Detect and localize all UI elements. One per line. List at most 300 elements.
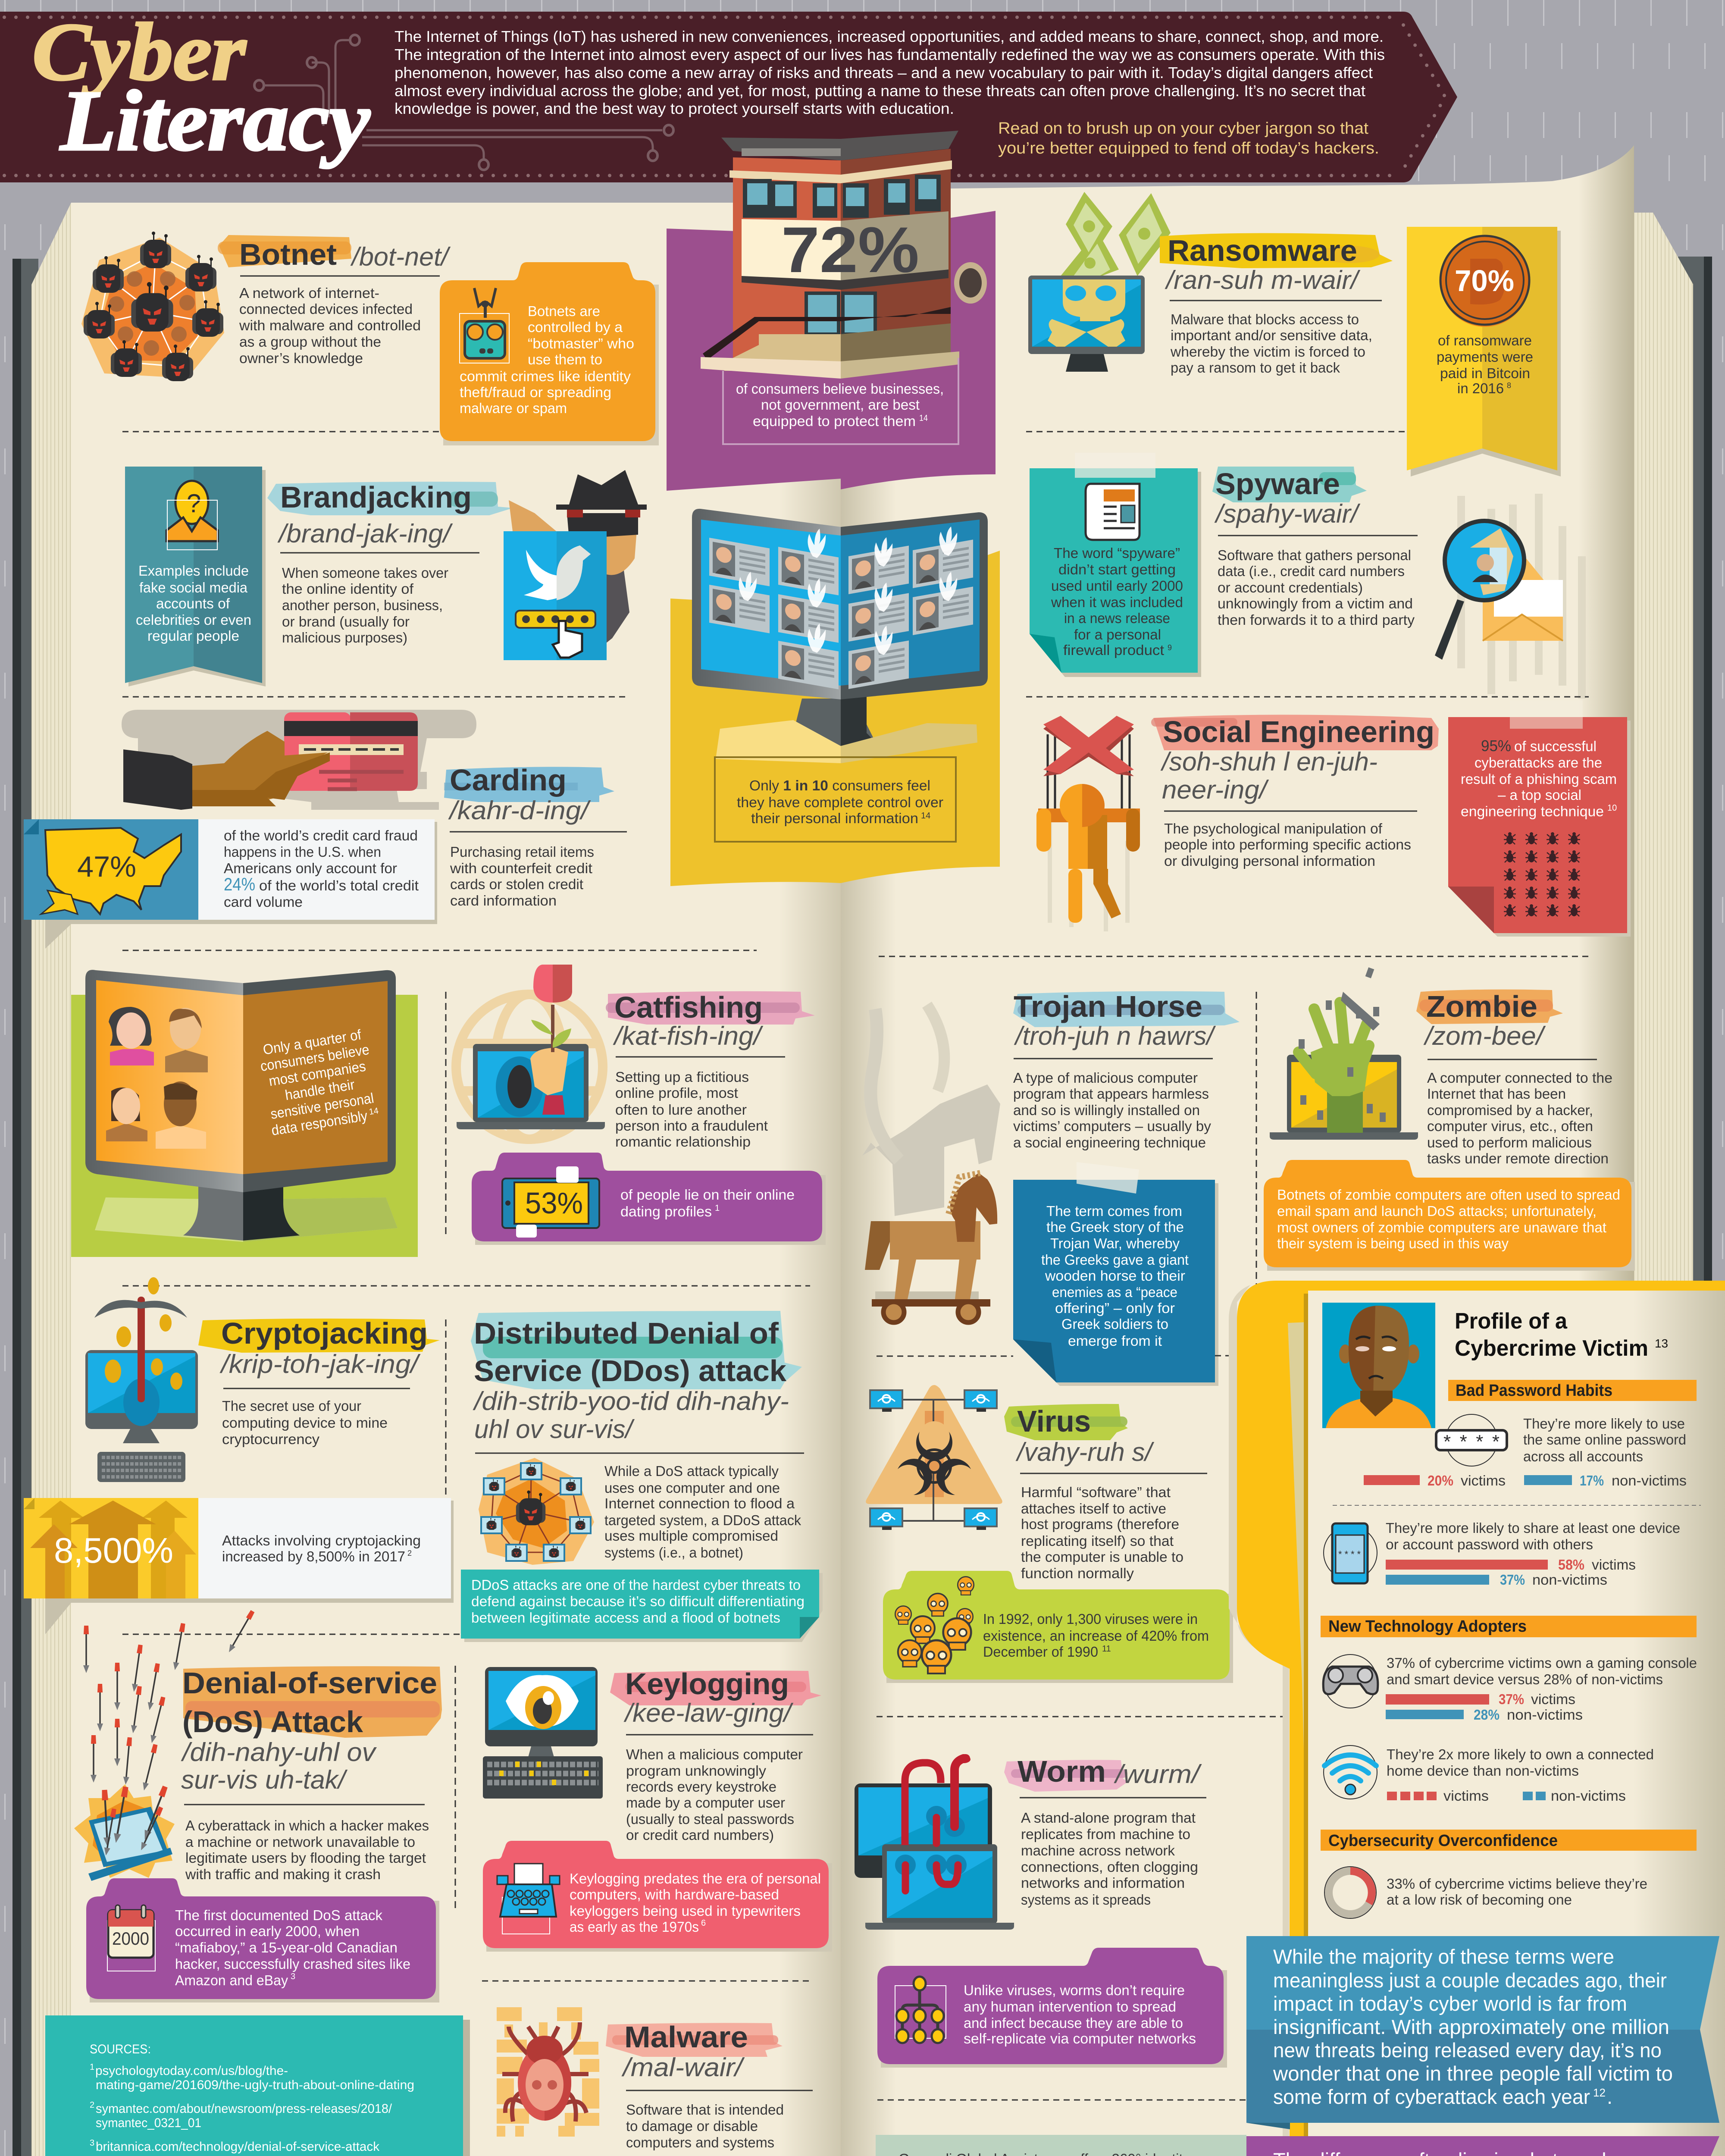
note text: the Greeks gave a giant <box>1041 1252 1189 1268</box>
icon: 33% ring <box>1324 1867 1376 1918</box>
ribbon text: regular people <box>147 628 239 644</box>
pronunciation: /kat-fish-ing/ <box>613 1022 764 1050</box>
note <box>1013 1162 1218 1386</box>
icon: eye monitor and keyboard <box>483 1667 603 1799</box>
definition: victims’ computers – usually by <box>1013 1118 1212 1134</box>
definition <box>1170 311 1372 376</box>
definition: Internet connection to flood a <box>604 1495 795 1511</box>
blue banner text: some form of cyberattack each year <box>1273 2085 1590 2108</box>
note text: 9 <box>1168 643 1172 652</box>
blue banner text: While the majority of these terms were <box>1273 1945 1614 1968</box>
ribbon text: Examples include <box>138 563 249 579</box>
definition: compromised by a hacker, <box>1427 1102 1593 1118</box>
callout folder <box>877 1948 1227 2068</box>
green backing <box>71 995 418 1257</box>
definition: systems (i.e., a botnet) <box>604 1545 743 1561</box>
definition: another person, business, <box>282 597 443 613</box>
icon: biohazard triangle with monitors <box>866 1385 1002 1530</box>
note text: offering” – only for <box>1055 1300 1175 1316</box>
blue banner text: insignificant. With approximately one million <box>1273 2015 1669 2038</box>
caption: of consumers believe businesses, <box>736 381 944 397</box>
heading: Distributed Denial of <box>474 1316 779 1350</box>
source list: 2 <box>90 2100 94 2110</box>
pronunciation: /dih-nahy-uhl ov <box>181 1738 377 1767</box>
callout text: 3 <box>291 1972 295 1981</box>
note text: for a personal <box>1074 627 1161 642</box>
source list: symantec.com/about/newsroom/press-releases/2018/ <box>96 2102 392 2116</box>
pronunciation: /wurm/ <box>1114 1760 1202 1789</box>
caption: they have complete control over <box>737 794 943 810</box>
heading: Denial-of-service <box>182 1666 437 1700</box>
heading brush <box>1004 1760 1128 1792</box>
note text: Greek soldiers to <box>1061 1316 1168 1332</box>
callout text: most owners of zombie computers are unaware that <box>1277 1219 1606 1235</box>
heading brush <box>1160 233 1393 268</box>
definition <box>604 1463 801 1561</box>
callout text: Amazon and eBay <box>175 1972 288 1988</box>
definition: unknowingly from a victim and <box>1218 595 1413 611</box>
callout text: 1 <box>715 1203 720 1213</box>
note text: The word “spyware” <box>1054 545 1180 561</box>
folder tab shape <box>1237 1281 1725 2156</box>
rotated caption: Only a quarter of <box>262 1026 363 1058</box>
caption: their personal information <box>751 810 918 826</box>
ribbon <box>125 467 266 686</box>
definition <box>615 1069 768 1150</box>
caption <box>736 381 944 429</box>
gaming bars: 28% <box>1474 1707 1500 1723</box>
definition: uses one computer and one <box>604 1480 780 1496</box>
panel: Worm <box>855 1755 1227 2068</box>
blue banner text: . <box>1607 2085 1612 2108</box>
source list: 3 <box>90 2138 94 2148</box>
connected home legend <box>1387 1788 1626 1804</box>
callout text: self-replicate via computer networks <box>964 2031 1196 2046</box>
section bar: cybersecurity overconfidence: Cybersecurity Overconfidence <box>1328 1832 1558 1850</box>
stat text: 2 <box>407 1549 412 1557</box>
icon: flying money <box>1061 192 1171 276</box>
icon: bug on pixel grid <box>497 2007 599 2137</box>
panel: sources <box>45 2015 470 2156</box>
callout text: email spam and launch DoS attacks; unfortunately, <box>1277 1203 1597 1219</box>
definition: pay a ransom to get it back <box>1171 360 1340 376</box>
definition: When a malicious computer <box>626 1746 803 1762</box>
panel: Virus <box>866 1385 1233 1683</box>
monitor frame <box>85 970 243 1192</box>
definition: a machine or network unavailable to <box>185 1834 415 1850</box>
heading brush <box>1013 991 1240 1027</box>
yellow backing <box>670 551 1000 886</box>
note text: didn’t start getting <box>1058 561 1176 577</box>
heading: Catfishing <box>614 990 763 1024</box>
stat number: 53% <box>525 1186 583 1220</box>
icon: typewriter <box>497 1864 560 1934</box>
definition: the computer is unable to <box>1021 1549 1183 1565</box>
definition: and so is willingly installed on <box>1013 1102 1200 1118</box>
gaming bars: non-victims <box>1507 1707 1583 1723</box>
definition: A computer connected to the <box>1427 1070 1612 1086</box>
icon: wifi <box>1324 1745 1377 1799</box>
gaming bars <box>1386 1691 1583 1723</box>
definition: person into a fraudulent <box>615 1118 768 1134</box>
heading brush <box>610 1670 821 1705</box>
callout text <box>175 1907 410 1988</box>
definition <box>222 1398 388 1447</box>
panel: Ransomware <box>1028 192 1561 476</box>
source list: 1 <box>90 2062 94 2072</box>
panel: Trojan Horse <box>862 990 1240 1386</box>
definition: function normally <box>1021 1565 1134 1581</box>
definition: with traffic and making it crash <box>185 1866 381 1882</box>
definition: connected devices infected <box>239 301 413 317</box>
note text: result of a phishing scam <box>1461 771 1617 787</box>
caption: not government, are best <box>761 397 920 413</box>
connected home legend: non-victims <box>1551 1788 1626 1804</box>
panel: Cryptojacking <box>24 1277 454 1634</box>
callout text: defend against because it’s so difficult differentiating <box>471 1593 805 1609</box>
heading <box>474 1316 786 1388</box>
title: Literacy <box>59 73 370 169</box>
pronunciation: /dih-strib-yoo-tid dih-nahy- <box>473 1387 789 1416</box>
definition: card information <box>450 893 557 909</box>
icon: network hierarchy <box>895 1977 946 2043</box>
banner: closing blue <box>1246 1936 1719 2129</box>
note text: 10 <box>1607 803 1617 813</box>
panel: Generali sponsor note <box>876 2135 1246 2156</box>
callout text: The first documented DoS attack <box>175 1907 383 1923</box>
heading brush <box>606 991 815 1025</box>
rotated caption: 14 <box>368 1106 379 1117</box>
ribbon text: fake social media <box>139 580 248 595</box>
callout text: as early as the 1970s <box>570 1919 699 1935</box>
icon: password: **** <box>1443 1431 1500 1452</box>
source list: symantec_0321_01 <box>96 2116 201 2130</box>
section bar: bad password habits: Bad Password Habits <box>1456 1382 1612 1400</box>
caption frame <box>715 757 956 842</box>
panel: Spyware <box>1030 453 1586 699</box>
callout text: computers, with hardware-based <box>570 1887 779 1902</box>
heading brush <box>606 2023 783 2057</box>
overconfidence text: 33% of cybercrime victims believe they’re <box>1387 1876 1647 1892</box>
note: 95% <box>1448 700 1631 937</box>
icon: hand holding credit card <box>122 710 476 810</box>
icon: phone password: **** <box>1338 1549 1361 1560</box>
definition: When someone takes over <box>282 565 448 581</box>
section bar: new technology adopters <box>1321 1616 1697 1637</box>
callout text <box>964 1982 1196 2046</box>
circuit traces <box>265 40 662 160</box>
definition <box>1218 547 1415 628</box>
callout text <box>570 1871 821 1935</box>
panel: Denial-of-service <box>74 1610 442 2002</box>
callout text: existence, an increase of 420% from <box>983 1628 1209 1644</box>
pronunciation <box>1160 747 1377 804</box>
panel: Carding <box>24 710 627 949</box>
same password bars: victims <box>1461 1473 1506 1489</box>
note text: when it was included <box>1051 594 1183 610</box>
definition: A stand-alone program that <box>1021 1810 1196 1826</box>
note text: of successful <box>1514 738 1597 754</box>
pronunciation <box>473 1387 789 1444</box>
pronunciation: /brand-jak-ing/ <box>277 519 453 548</box>
callout folder <box>86 1878 439 2002</box>
caption <box>737 777 943 826</box>
note text: wooden horse to their <box>1045 1268 1185 1284</box>
panel: center monitor statistic <box>670 509 1000 886</box>
icon: rose through laptop <box>456 965 605 1139</box>
definition: While a DoS attack typically <box>604 1463 779 1479</box>
share password bars: 58% <box>1558 1557 1584 1573</box>
call to read on: Read on to brush up on your cyber jargon so that <box>998 119 1368 138</box>
profile title: Profile of a <box>1455 1309 1568 1334</box>
source list: britannica.com/technology/denial-of-service-attack <box>96 2140 380 2154</box>
blue banner text: 12 <box>1593 2086 1606 2099</box>
icon: rising arrows <box>30 1501 196 1598</box>
callout folder <box>483 1841 832 1952</box>
caption: Only 1 in 10 consumers feel <box>749 777 930 793</box>
pronunciation: /vahy-ruh s/ <box>1015 1438 1154 1467</box>
definition: online profile, most <box>615 1085 738 1101</box>
heading: Botnet <box>239 238 337 271</box>
definition: made by a computer user <box>626 1795 785 1811</box>
panel: Catfishing <box>456 965 826 1245</box>
inner sheet <box>1288 1322 1308 1919</box>
definition: Purchasing retail items <box>450 844 594 860</box>
share password bars: victims <box>1592 1557 1636 1573</box>
faces <box>106 1007 208 1149</box>
section bar: bad password habits <box>1448 1380 1697 1401</box>
definition: systems as it spreads <box>1021 1892 1151 1908</box>
rotated caption: consumers believe <box>259 1041 370 1074</box>
gaming text: and smart device versus 28% of non-victims <box>1387 1671 1663 1687</box>
heading: Worm <box>1017 1755 1106 1788</box>
calendar year: 2000 <box>112 1928 149 1949</box>
definition: uses multiple compromised <box>604 1528 778 1544</box>
callout text: Botnets are <box>528 303 600 319</box>
share password text: They’re more likely to share at least one device <box>1386 1520 1680 1536</box>
connected home legend: victims <box>1443 1788 1489 1804</box>
intro text: The Internet of Things (IoT) has ushered in new conveniences, increased opportunities, and added means to share, connect, shop, and more. <box>394 28 1384 45</box>
heading brush <box>1416 990 1563 1024</box>
definition: data (i.e., credit card numbers <box>1218 563 1405 579</box>
intro text: almost every individual across the globe; and yet, for most, putting a name to these threats can often prove challenging. It’s no secret that <box>394 82 1365 100</box>
definition: Malware that blocks access to <box>1171 311 1359 327</box>
icon: gamepad <box>1323 1655 1378 1708</box>
callout text: Botnets of zombie computers are often used to spread <box>1277 1187 1620 1203</box>
callout text: and infect because they are able to <box>964 2015 1183 2031</box>
overconfidence text <box>1387 1876 1647 1908</box>
definition: replicates from machine to <box>1021 1826 1190 1842</box>
icon: bot network <box>81 232 224 381</box>
ribbon text: accounts of <box>156 595 230 611</box>
note text: the Greek story of the <box>1046 1219 1184 1235</box>
ribbon text: 8 <box>1507 381 1511 390</box>
stat card: 47% <box>24 819 437 949</box>
note text <box>1041 1203 1189 1349</box>
title: Cyber <box>32 7 247 97</box>
connected home text: home device than non-victims <box>1387 1763 1579 1779</box>
definition <box>626 1746 803 1843</box>
icon: password <box>1436 1414 1507 1466</box>
same password text <box>1523 1416 1686 1464</box>
heading brush <box>471 1311 802 1389</box>
stat text: card volume <box>224 894 303 910</box>
pronunciation: /kee-law-ging/ <box>623 1698 793 1727</box>
header banner <box>0 7 1457 182</box>
same password text: the same online password <box>1523 1432 1686 1448</box>
note text: The term comes from <box>1046 1203 1182 1219</box>
stat text: of the world’s total credit <box>259 877 419 893</box>
callout text: occurred in early 2000, when <box>175 1923 360 1939</box>
ribbon text: of ransomware <box>1438 332 1532 348</box>
ribbon text: paid in Bitcoin <box>1440 365 1530 381</box>
panel: 72% statistic <box>667 131 996 491</box>
heading brush <box>1212 467 1367 502</box>
definition: A type of malicious computer <box>1013 1070 1198 1086</box>
intro text: phenomenon, however, has also come a new array of risks and threats – and a new vocabulary to pair with it. Today’s digital dangers affect <box>394 64 1373 81</box>
icon: worm through computers <box>855 1755 1014 1930</box>
note text: 95% <box>1481 737 1511 755</box>
source list <box>90 2062 427 2156</box>
pronunciation: /spahy-wair/ <box>1214 499 1360 528</box>
callout text: keyloggers being used in typewriters <box>570 1903 801 1919</box>
blue banner text: new threats being released every day, it’s no <box>1273 2039 1662 2062</box>
stat text: 24% <box>224 874 255 894</box>
icon: puppet <box>1036 716 1140 931</box>
pronunciation: /mal-wair/ <box>621 2053 745 2082</box>
callout text: use them to <box>528 351 602 367</box>
same password bars: 17% <box>1580 1473 1604 1489</box>
callout text: December of 1990 <box>983 1644 1098 1660</box>
definition: networks and information <box>1021 1875 1185 1891</box>
ribbon text: payments were <box>1437 349 1533 365</box>
bookmark ribbon <box>1407 227 1561 476</box>
intro text: knowledge is power, and the best way to protect yourself starts with education. <box>394 100 954 117</box>
definition: Harmful “software” that <box>1021 1484 1171 1500</box>
stat card: 8,500% <box>24 1498 454 1634</box>
heading: Ransomware <box>1168 234 1357 267</box>
icon: newspaper <box>1086 484 1140 540</box>
panel: Keylogging <box>483 1667 832 1952</box>
icon: arrows striking laptop <box>74 1610 255 1881</box>
pronunciation: /krip-toh-jak-ing/ <box>219 1350 421 1379</box>
heading brush <box>183 1666 442 1738</box>
definition: to damage or disable <box>626 2118 758 2134</box>
stat text: Americans only account for <box>224 860 397 876</box>
definition: malicious purposes) <box>282 630 407 646</box>
screen <box>96 980 243 1174</box>
connected home text: They’re 2x more likely to own a connected <box>1387 1746 1654 1762</box>
same password bars: non-victims <box>1612 1473 1687 1489</box>
definition <box>185 1818 429 1882</box>
definition: A network of internet- <box>239 285 379 301</box>
icon: zombie hand through laptop <box>1270 967 1418 1140</box>
intro text <box>394 28 1385 117</box>
call to read on: you’re better equipped to fend off today’s hackers. <box>998 139 1379 157</box>
definition: machine across network <box>1021 1843 1175 1858</box>
callout text: their system is being used in this way <box>1277 1235 1509 1251</box>
definition: The psychological manipulation of <box>1164 821 1383 837</box>
icon: skull pile <box>895 1577 974 1673</box>
profile sheet <box>1308 1291 1725 2156</box>
door ring <box>954 262 987 304</box>
definition: used to perform malicious <box>1427 1134 1592 1150</box>
icon: robot <box>460 288 509 363</box>
callout text: commit crimes like identity <box>460 368 631 384</box>
definition: then forwards it to a third party <box>1218 612 1415 628</box>
definition: Software that gathers personal <box>1218 547 1411 563</box>
pronunciation: /bot-net/ <box>350 242 451 271</box>
note text <box>1461 737 1617 819</box>
stat text: happens in the U.S. when <box>224 844 381 860</box>
definition <box>282 565 448 646</box>
definition: with malware and controlled <box>239 317 421 333</box>
note text: in a news release <box>1064 610 1170 626</box>
icon: phone with chat <box>502 1166 599 1238</box>
callout text: any human intervention to spread <box>964 1999 1176 2015</box>
title <box>32 7 370 169</box>
definition <box>450 844 594 909</box>
stat text <box>222 1532 421 1564</box>
ribbon text: celebrities or even <box>136 612 251 628</box>
heading: Virus <box>1017 1404 1091 1438</box>
same password bars: 20% <box>1428 1473 1453 1489</box>
share password bars <box>1386 1557 1636 1588</box>
note <box>1030 453 1201 677</box>
share password text <box>1386 1520 1680 1552</box>
definition: often to lure another <box>615 1102 747 1118</box>
heading: Keylogging <box>625 1667 789 1701</box>
rotated caption: most companies <box>268 1058 367 1089</box>
icon: trojan horse with shadow <box>862 1005 1000 1322</box>
icon: magnifier over envelope <box>1435 494 1586 699</box>
stand flaps <box>95 1197 398 1242</box>
same password text: They’re more likely to use <box>1523 1416 1685 1432</box>
definition: computer virus, etc., often <box>1427 1118 1593 1134</box>
share password text: or account password with others <box>1386 1536 1593 1552</box>
blue banner text <box>1273 1945 1673 2108</box>
callout text: hacker, successfully crashed sites like <box>175 1956 410 1972</box>
rotated caption: handle their <box>284 1076 356 1103</box>
heading brush <box>444 767 614 802</box>
definition: host programs (therefore <box>1021 1516 1179 1532</box>
banner: closing purple <box>1246 2136 1719 2156</box>
pronunciation: /kahr-d-ing/ <box>448 796 591 825</box>
definition: legitimate users by flooding the target <box>185 1850 426 1866</box>
definition <box>1013 1070 1212 1150</box>
section bar: cybersecurity overconfidence <box>1321 1830 1697 1851</box>
pronunciation: sur-vis uh-tak/ <box>181 1765 348 1794</box>
note text: enemies as a “peace <box>1052 1284 1177 1300</box>
pronunciation <box>181 1738 377 1794</box>
definition <box>1021 1810 1198 1908</box>
blue banner text: wonder that one in three people fall victim to <box>1273 2062 1673 2085</box>
caption frame <box>723 358 958 444</box>
callout text: DDoS attacks are one of the hardest cyber threats to <box>471 1577 801 1593</box>
heading: Carding <box>450 763 567 797</box>
definition: or credit card numbers) <box>626 1827 774 1843</box>
callout text: Keylogging predates the era of personal <box>570 1871 821 1887</box>
icon: calendar <box>107 1905 155 1971</box>
definition: computers and systems <box>626 2134 774 2150</box>
portrait <box>1322 1303 1435 1428</box>
panel: Distributed Denial of Service <box>461 1311 823 1642</box>
pronunciation: /soh-shuh l en-juh- <box>1160 747 1377 776</box>
callout text: 6 <box>701 1918 706 1928</box>
callout text <box>620 1187 795 1219</box>
sources heading: SOURCES: <box>90 2042 151 2056</box>
icon: anonymous person <box>166 481 218 550</box>
